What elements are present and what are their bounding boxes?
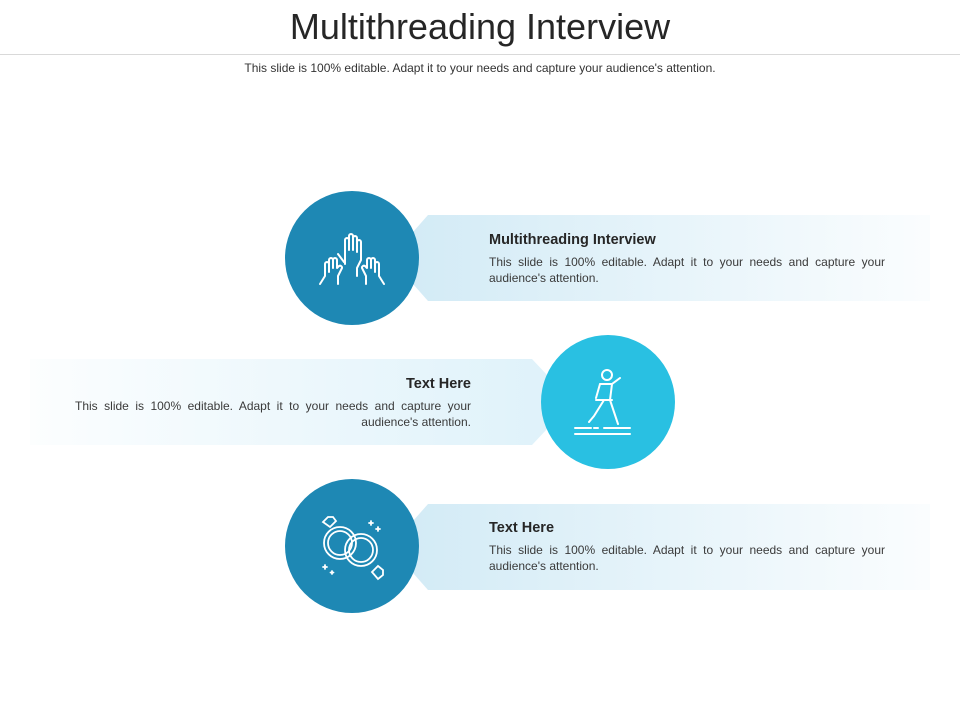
text block 2	[75, 376, 471, 429]
text block 3	[489, 520, 885, 573]
text block 1: Multithreading Interview	[489, 232, 656, 248]
text block 1: This slide is 100% editable. Adapt it to your needs and capture your audience's attention.	[489, 255, 885, 285]
circle 1 with hands icon	[285, 191, 419, 325]
banner 3	[413, 504, 930, 590]
text block 1	[489, 232, 885, 285]
text block 3: This slide is 100% editable. Adapt it to your needs and capture your audience's attention.	[489, 543, 885, 573]
subtitle: This slide is 100% editable. Adapt it to your needs and capture your audience's attention.	[244, 61, 716, 75]
banner 2	[30, 359, 548, 445]
circle 2 with runner icon	[541, 335, 675, 469]
text block 2: Text Here	[406, 376, 471, 392]
title: Multithreading Interview	[290, 6, 670, 47]
text block 3: Text Here	[489, 520, 554, 536]
circle 3 with rings icon	[285, 479, 419, 613]
banner 1	[413, 215, 930, 301]
text block 2: This slide is 100% editable. Adapt it to your needs and capture your audience's attention.	[75, 399, 471, 429]
